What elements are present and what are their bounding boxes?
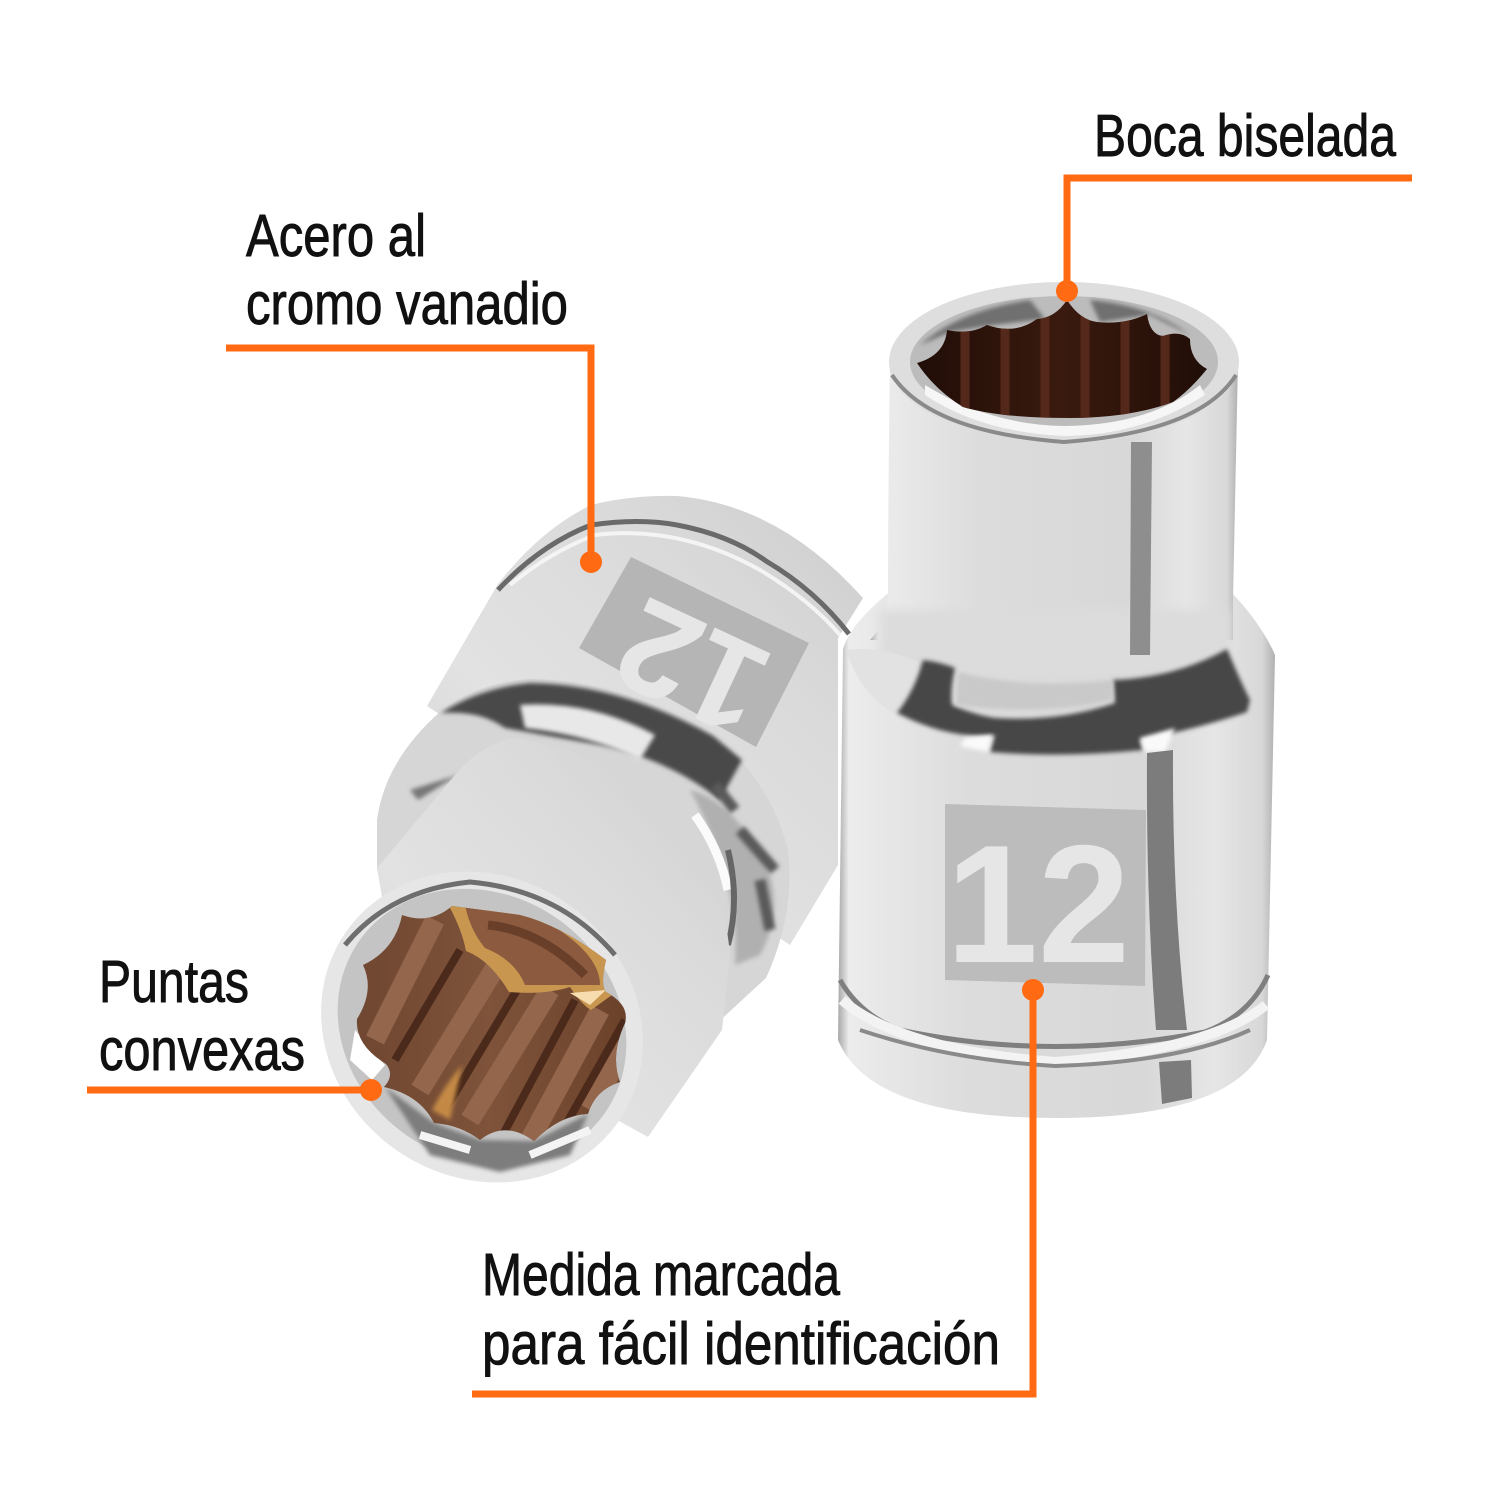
size marking on right socket: 12 [946,810,1130,998]
callout: Puntas convexas: convexas [99,1017,305,1083]
callout: Acero al cromo vanadio: Acero al [246,203,426,269]
callout: Acero al cromo vanadio: cromo vanadio [246,271,568,337]
callout: Puntas convexas [87,949,382,1101]
callout: Medida marcada para fácil identificación: para fácil identificación [482,1311,1000,1377]
bottom groove [840,975,1268,1066]
shoulder highlight left [846,649,919,715]
size marking on left socket: 12 [595,570,790,765]
callout: Puntas convexas: Puntas [99,949,249,1015]
front rim of left socket [260,809,704,1245]
twelve-point opening of left socket [356,906,626,1141]
inner ridges [375,920,640,1140]
twelve-point opening [917,302,1207,418]
rear body of left socket [427,496,863,945]
bevel reflections [920,300,1045,345]
callout: Medida marcada para fácil identificación: Medida marcada [482,1242,840,1308]
rim reflections [385,1087,588,1172]
lower body [838,594,1275,1118]
top rim [889,282,1239,442]
shoulder reflections [410,683,775,965]
blend between upper and lower body [880,610,1230,680]
callout: Medida marcada para fácil identificación [472,979,1044,1394]
callout: Acero al cromo vanadio [226,203,602,573]
socket: left, lying tilted [321,496,863,1182]
shoulder reflection band [897,649,1250,755]
front cylinder of left socket [377,738,730,1137]
inner gear, gold [449,900,612,1010]
callout: Boca biselada: Boca biselada [1094,103,1396,169]
upper body [870,360,1238,640]
callout: Boca biselada [1056,103,1412,302]
shoulder of left socket [377,679,789,1037]
socket: right, standing [838,282,1275,1118]
vertical reflections [1130,442,1152,655]
